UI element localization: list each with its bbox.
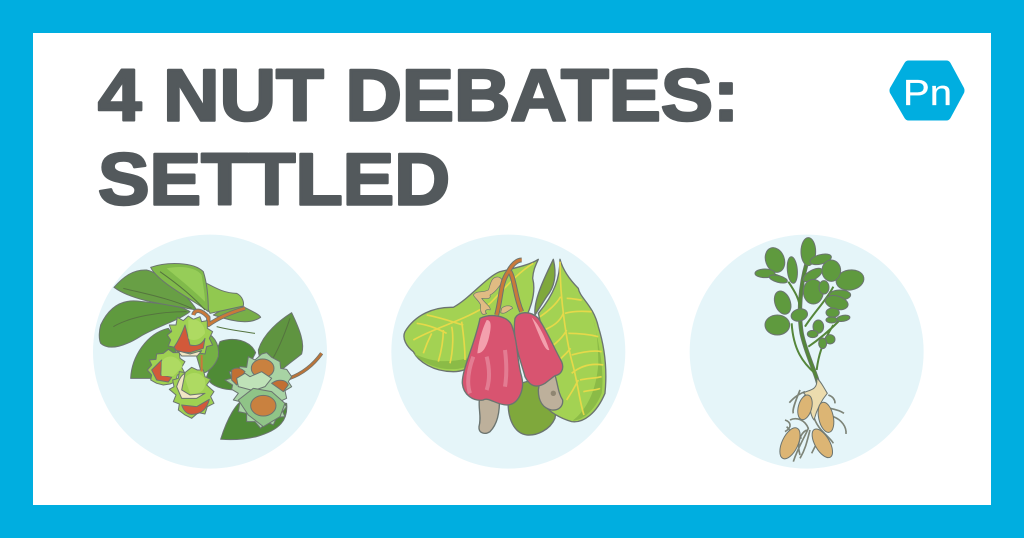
stems <box>497 260 522 315</box>
stems <box>767 263 840 390</box>
roots <box>785 390 846 462</box>
title: SETTLED <box>98 140 450 221</box>
cashew nuts <box>479 375 563 433</box>
leaves <box>99 264 303 440</box>
background circle <box>93 235 327 469</box>
flower cluster <box>473 277 513 314</box>
cashew apples <box>462 313 563 405</box>
stems <box>193 308 322 378</box>
illustration: hazelnut branch in circle <box>93 235 327 469</box>
stem base <box>803 378 827 420</box>
logo: Pn hexagon: Pn <box>903 72 952 113</box>
peanut pods <box>776 393 837 462</box>
title: 4 NUT DEBATES: <box>98 56 739 137</box>
background circle <box>690 235 924 469</box>
leaves <box>404 259 606 435</box>
illustration: cashew apples in circle <box>391 235 625 469</box>
logo: Pn hexagon <box>890 60 964 120</box>
background circle <box>391 235 625 469</box>
hazelnuts with husks <box>225 353 292 428</box>
title <box>98 56 739 221</box>
illustration: peanut plant in circle <box>690 235 924 469</box>
leaves <box>755 238 866 349</box>
open green burs <box>147 316 214 418</box>
